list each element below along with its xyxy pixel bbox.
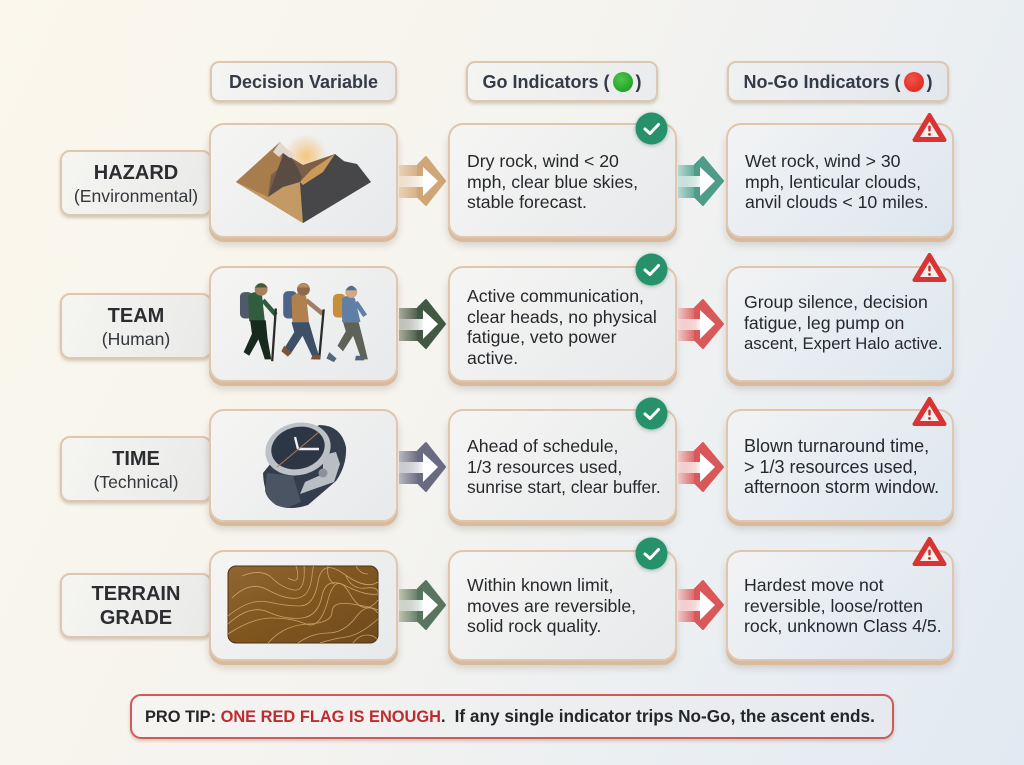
text: hazard no-go: mph, lenticular clouds,: [745, 172, 921, 192]
icon: mountain: [236, 136, 371, 223]
header: Go Indicators: [466, 61, 658, 102]
text: team go: fatigue, veto power: [467, 327, 616, 347]
text: hazard go: Dry rock, wind < 20: [467, 151, 619, 171]
text: time no-go: afternoon storm window.: [744, 477, 939, 497]
arrow: go to no-go hazard: [678, 156, 724, 206]
row label: Hazard: [60, 150, 212, 216]
text: terrain go: Within known limit,: [467, 575, 613, 595]
icon: hikers: [240, 283, 368, 362]
row label: Terrain Grade: [60, 573, 212, 638]
row label: Time: TIME: [112, 448, 160, 470]
text: hazard no-go: Wet rock, wind > 30: [745, 151, 900, 171]
text: hazard no-go: [745, 151, 928, 212]
callout: pro tip: [130, 694, 894, 739]
row label: Hazard: (Environmental): [74, 186, 198, 206]
panel: terrain no-go: [726, 550, 954, 661]
header: No-Go Indicators: [727, 61, 949, 102]
panel: time go: [448, 409, 677, 522]
panel: team image card: [209, 266, 398, 382]
text: terrain go: moves are reversible,: [467, 596, 636, 616]
header: Decision Variable: Decision Variable: [229, 72, 378, 92]
text: team go: clear heads, no physical: [467, 307, 657, 327]
text: hazard go: mph, clear blue skies,: [467, 172, 638, 192]
text: terrain no-go: reversible, loose/rotten: [744, 596, 923, 616]
arrow: hazard to go: [399, 156, 446, 206]
text: terrain no-go: rock, unknown Class 4/5.: [744, 616, 942, 636]
panel: hazard image card: [209, 123, 398, 238]
icon: warning: [912, 252, 947, 282]
row label: Team: [60, 293, 212, 359]
text: time go: 1/3 resources used,: [467, 457, 622, 477]
text: terrain go: [467, 575, 636, 636]
icon: warning: [912, 112, 947, 142]
icon: check: [633, 396, 670, 433]
text: time no-go: > 1/3 resources used,: [744, 457, 918, 477]
text: team go: Active communication,: [467, 286, 644, 306]
panel: terrain go: [448, 550, 677, 661]
text: team no-go: Group silence, decision: [744, 292, 928, 312]
text: terrain no-go: [744, 575, 942, 636]
row label: Terrain Grade: TERRAIN: [92, 583, 180, 605]
row label: Team: (Human): [102, 329, 170, 349]
text: team no-go: [744, 292, 942, 353]
icon: warning: [912, 396, 947, 426]
panel: team go: [448, 266, 677, 382]
text: time go: Ahead of schedule,: [467, 436, 618, 456]
panel: team no-go: [726, 266, 954, 382]
panel: time image card: [209, 409, 398, 522]
text: hazard no-go: anvil clouds < 10 miles.: [745, 192, 928, 212]
callout: pro tip: PRO TIP: ONE RED FLAG IS ENOUGH. If any single indicator trips No-Go, the ascent ends.: [145, 706, 875, 726]
icon: check: [633, 536, 670, 573]
row label: Terrain Grade: GRADE: [100, 607, 172, 629]
icon: check: [633, 111, 670, 148]
text: terrain no-go: Hardest move not: [744, 575, 884, 595]
header: Decision Variable: [210, 61, 397, 102]
panel: terrain image card: [209, 550, 398, 661]
text: hazard go: stable forecast.: [467, 192, 587, 212]
text: terrain go: solid rock quality.: [467, 616, 601, 636]
icon: topographic map: [228, 566, 378, 644]
text: time go: sunrise start, clear buffer.: [467, 477, 661, 497]
panel: time no-go: [726, 409, 954, 522]
panel: hazard no-go: [726, 123, 954, 238]
arrow: team go to no-go: [678, 299, 724, 349]
text: team go: [467, 286, 657, 368]
row label: Time: (Technical): [93, 472, 179, 492]
row label: Hazard: HAZARD: [94, 162, 178, 184]
panel: hazard go: [448, 123, 677, 238]
arrow: time to go: [399, 442, 446, 492]
arrow: terrain go to no-go: [678, 580, 724, 630]
text: hazard go: [467, 151, 638, 212]
arrow: team to go: [399, 299, 446, 349]
icon: warning: [912, 536, 947, 566]
header: Go Indicators: Go Indicators ( ): [482, 72, 642, 92]
text: time no-go: [744, 436, 939, 497]
text: team no-go: ascent, Expert Halo active.: [744, 334, 942, 353]
text: team go: active.: [467, 348, 518, 368]
icon: check: [633, 252, 670, 289]
text: time no-go: Blown turnaround time,: [744, 436, 929, 456]
text: time go: [467, 436, 661, 497]
row label: Time: [60, 436, 212, 502]
icon: watch: [263, 422, 346, 508]
header: No-Go Indicators: No-Go Indicators ( ): [744, 72, 932, 92]
arrow: time go to no-go: [678, 442, 724, 492]
text: team no-go: fatigue, leg pump on: [744, 313, 904, 333]
arrow: terrain to go: [399, 580, 446, 630]
row label: Team: TEAM: [108, 305, 164, 327]
